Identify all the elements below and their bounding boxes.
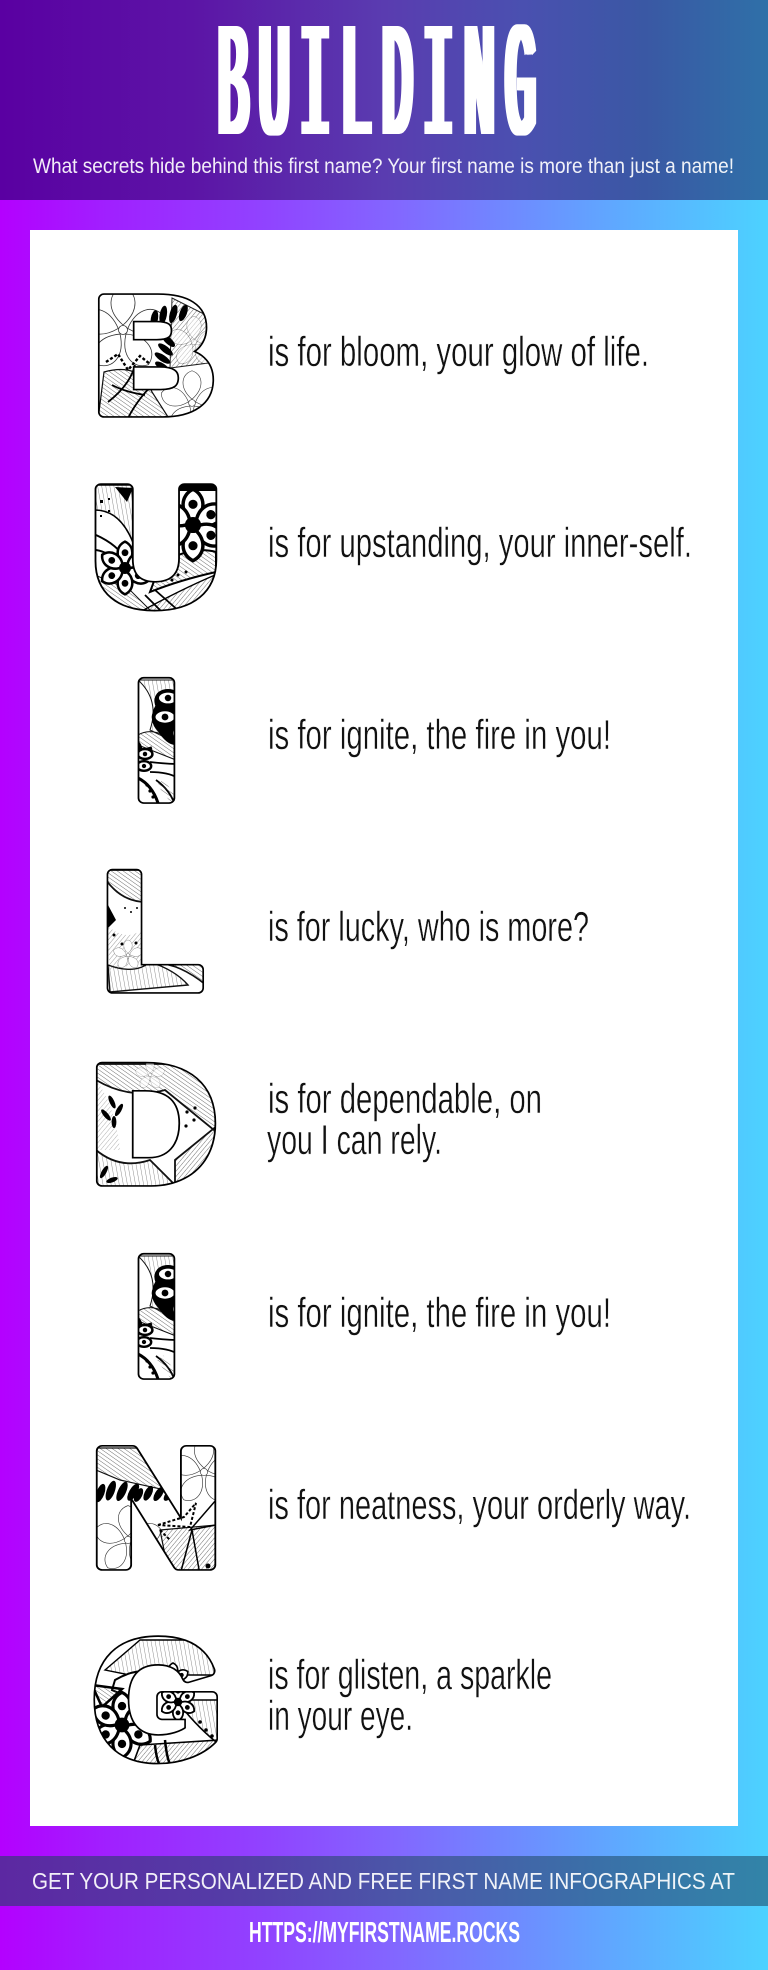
header band (0, 0, 768, 200)
white content panel (30, 230, 738, 1826)
icon: doodle letter D (96, 1062, 216, 1187)
icon: doodle letter G (93, 1635, 218, 1764)
row text: G: is for glisten, a sparkle (268, 1651, 552, 1698)
row text: I (second): is for ignite, the fire in you! (268, 1289, 611, 1336)
row text: G (268, 1651, 552, 1739)
icon: doodle letter L: L (101, 840, 203, 1024)
icon: doodle letter I: I (132, 1223, 181, 1410)
row: letter N (96, 1445, 216, 1571)
icon: doodle letter N: N (90, 1416, 222, 1601)
icon: doodle letter N (96, 1445, 216, 1571)
row text: D: is for dependable, on (268, 1075, 542, 1122)
icon: doodle letter B: B (92, 263, 216, 447)
icon: doodle letter D: D (90, 1033, 217, 1217)
icon: doodle letter U (94, 483, 218, 612)
row: letter I (second) (138, 1252, 176, 1380)
row: letter U (94, 483, 218, 612)
footer url: HTTPS://MYFIRSTNAME.ROCKS (249, 1917, 520, 1949)
row text: D (267, 1075, 542, 1163)
icon: doodle letter I (138, 676, 176, 804)
icon: doodle letter L (106, 868, 204, 994)
row: letter D (96, 1062, 216, 1187)
title: BUILDING (218, 0, 546, 184)
footer band (0, 1856, 768, 1906)
row text: D: you I can rely. (267, 1116, 442, 1163)
icon: doodle letter I (138, 1252, 176, 1380)
row text: L: is for lucky, who is more? (268, 903, 589, 950)
row: letter B (98, 293, 214, 418)
icon: doodle letter B (98, 293, 214, 418)
icon: doodle letter I: I (132, 647, 181, 834)
row: letter L (106, 868, 204, 994)
row: letter I (138, 676, 176, 804)
row text: G: in your eye. (268, 1692, 413, 1739)
icon: doodle letter U: U (90, 454, 222, 640)
icon: doodle letter G: G (92, 1608, 223, 1793)
row: letter G (93, 1635, 218, 1764)
row text: I: is for ignite, the fire in you! (268, 711, 611, 758)
